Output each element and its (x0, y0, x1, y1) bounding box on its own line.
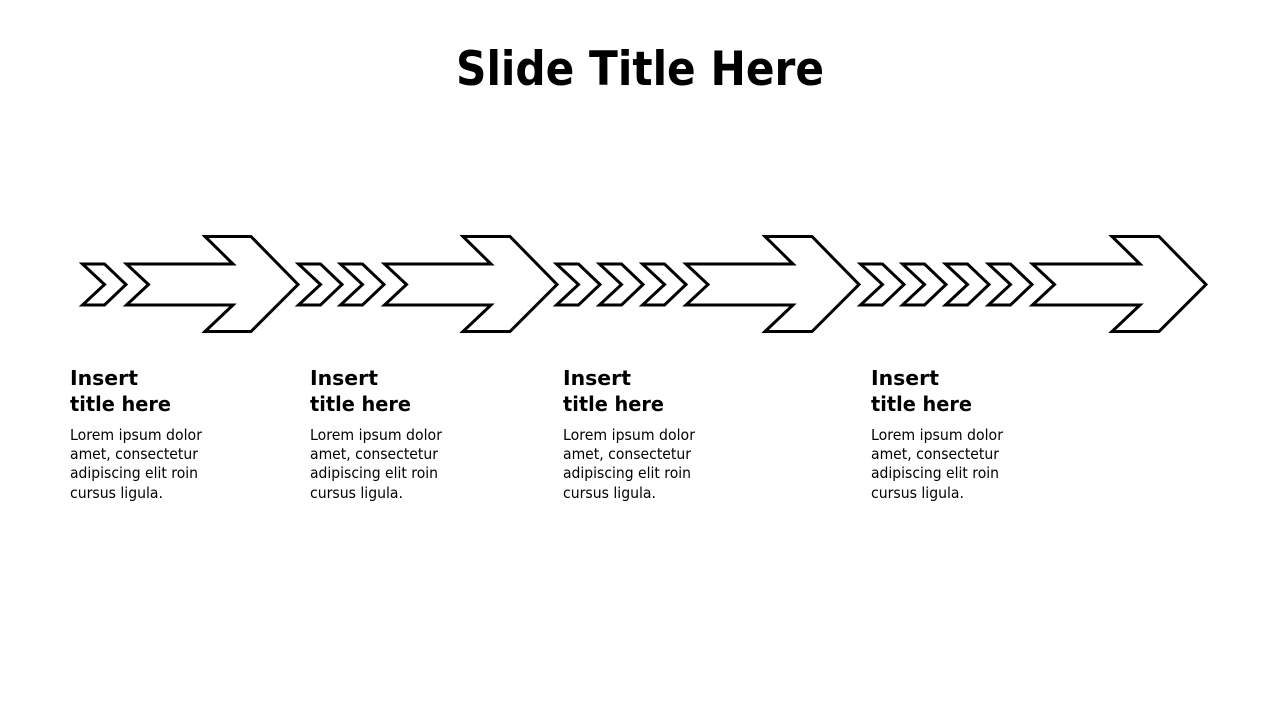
body 4: Lorem ipsum dolor (871, 426, 1004, 444)
body 3: cursus ligula. (563, 484, 656, 502)
heading 3 (563, 366, 664, 416)
large arrow 4 (1032, 236, 1206, 332)
body 4: adipiscing elit roin (871, 464, 999, 482)
body 1: adipiscing elit roin (70, 464, 198, 482)
large arrow 1 (126, 236, 298, 332)
chevron 4 of group 4 (988, 264, 1032, 305)
body 4: amet, consectetur (871, 445, 1000, 463)
text block 1 (70, 366, 203, 502)
body 3 (563, 426, 696, 502)
heading 2: title here (310, 392, 411, 416)
body 3: adipiscing elit roin (563, 464, 691, 482)
arrow chain (82, 236, 1206, 332)
body 2: Lorem ipsum dolor (310, 426, 443, 444)
body 1 (70, 426, 203, 502)
text block 2 (310, 366, 443, 502)
body 3: amet, consectetur (563, 445, 692, 463)
body 3: Lorem ipsum dolor (563, 426, 696, 444)
title: Slide Title Here (456, 42, 824, 97)
chevron 1 of group 3 (556, 264, 600, 305)
heading 4: Insert (871, 366, 939, 390)
heading 1: title here (70, 392, 171, 416)
chevron 2 of group 4 (902, 264, 946, 305)
chevron 2 of group 2 (340, 264, 384, 305)
body 4 (871, 426, 1004, 502)
heading 2 (310, 366, 411, 416)
body 1: cursus ligula. (70, 484, 163, 502)
body 1: amet, consectetur (70, 445, 199, 463)
heading 3: Insert (563, 366, 631, 390)
heading 3: title here (563, 392, 664, 416)
chevron 1 of group 1 (82, 264, 126, 305)
body 2: amet, consectetur (310, 445, 439, 463)
heading 4 (871, 366, 972, 416)
body 2: cursus ligula. (310, 484, 403, 502)
chevron 2 of group 3 (600, 264, 643, 305)
heading 1 (70, 366, 171, 416)
chevron 3 of group 4 (946, 264, 989, 305)
heading 1: Insert (70, 366, 138, 390)
heading 4: title here (871, 392, 972, 416)
large arrow 3 (686, 236, 859, 332)
text block 3 (563, 366, 696, 502)
large arrow 2 (384, 236, 557, 332)
body 1: Lorem ipsum dolor (70, 426, 203, 444)
body 2 (310, 426, 443, 502)
chevron 1 of group 2 (298, 264, 342, 305)
chevron 1 of group 4 (860, 264, 904, 305)
chevron 3 of group 3 (642, 264, 686, 305)
body 2: adipiscing elit roin (310, 464, 438, 482)
text block 4 (871, 366, 1004, 502)
body 4: cursus ligula. (871, 484, 964, 502)
heading 2: Insert (310, 366, 378, 390)
